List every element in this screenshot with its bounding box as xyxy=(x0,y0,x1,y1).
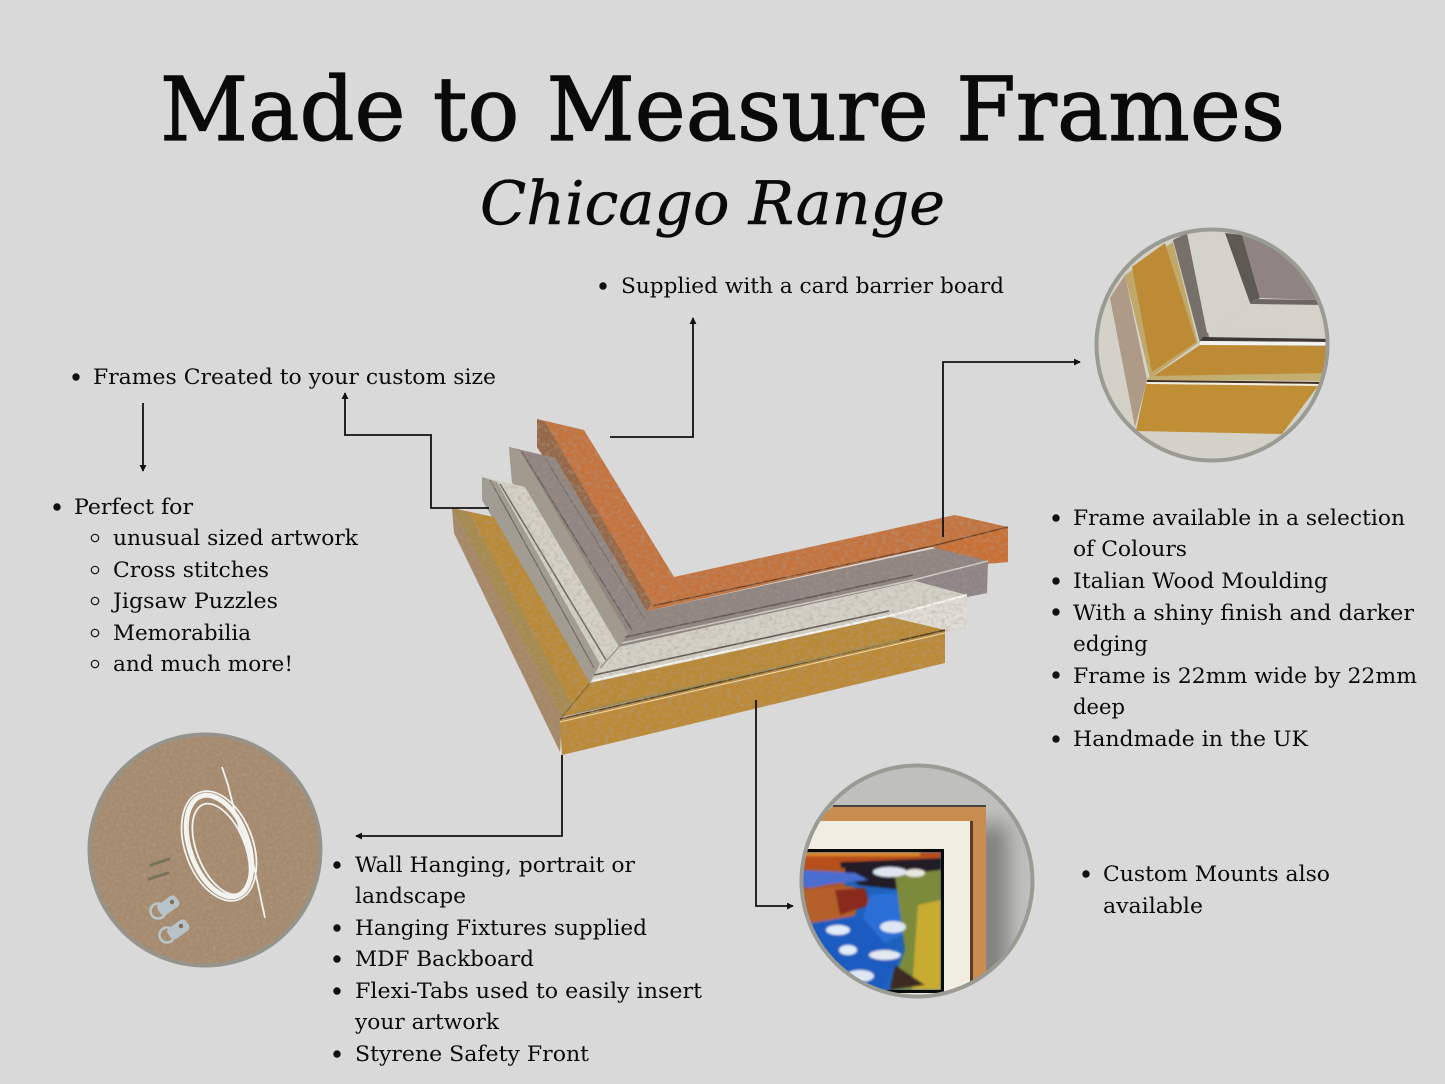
arrow: custom size down to perfect for xyxy=(142,403,144,471)
title: Made to Measure Frames xyxy=(160,58,1285,161)
text block: card barrier board: Supplied with a card barrier board xyxy=(621,274,1004,298)
text block: custom size: Frames Created to your custom size xyxy=(93,365,496,389)
text block: hanging and backing: Flexi-Tabs used to easily insert xyxy=(355,979,703,1003)
text block: hanging and backing: Styrene Safety Front xyxy=(355,1042,590,1066)
text block: hanging and backing: landscape xyxy=(355,884,466,908)
text block: perfect for list: Memorabilia xyxy=(113,621,251,645)
icon: D-ring hangers xyxy=(150,904,174,942)
text block: frame features: of Colours xyxy=(1073,537,1187,561)
icon: screws xyxy=(149,859,169,879)
frame corner samples xyxy=(452,419,1008,755)
arrow: frame to barrier board xyxy=(610,318,693,437)
text block: hanging and backing: Hanging Fixtures supplied xyxy=(355,916,647,940)
photo circle: frame corner close-up xyxy=(1090,225,1335,465)
text block: perfect for list xyxy=(53,495,358,676)
text block: hanging and backing: your artwork xyxy=(354,1010,499,1034)
painting xyxy=(800,852,941,990)
text block: frame features: Frame available in a selection xyxy=(1073,506,1405,530)
cream frame sample xyxy=(482,477,967,683)
text block: frame features: deep xyxy=(1073,695,1125,719)
text block: perfect for list: Perfect for xyxy=(74,495,194,519)
text block: hanging and backing: MDF Backboard xyxy=(355,947,534,971)
text block: custom mounts: available xyxy=(1103,894,1203,918)
photo circle: hanging fixtures xyxy=(85,730,325,970)
text block: perfect for list: Jigsaw Puzzles xyxy=(111,589,278,613)
icon: hanging cord xyxy=(180,766,266,918)
arrow: frame to corner photo xyxy=(943,362,1080,537)
arrow: frame to custom size xyxy=(345,393,489,508)
arrow: frame to hanging list xyxy=(356,755,562,836)
text block: perfect for list: Cross stitches xyxy=(113,558,269,582)
text block: hanging and backing: Wall Hanging, portrait or xyxy=(355,853,636,877)
text block: custom mounts xyxy=(1082,862,1330,918)
gray frame sample xyxy=(509,447,988,647)
gold frame sample xyxy=(452,508,945,755)
text block: perfect for list: and much more! xyxy=(113,652,293,676)
subtitle: Chicago Range xyxy=(480,169,945,239)
text block: hanging and backing xyxy=(333,853,703,1066)
text block: frame features: With a shiny finish and darker xyxy=(1073,601,1415,625)
text block: frame features: Italian Wood Moulding xyxy=(1073,569,1328,593)
text block: custom mounts: Custom Mounts also xyxy=(1103,862,1330,886)
text block: frame features: edging xyxy=(1073,632,1148,656)
text block: frame features xyxy=(1052,506,1417,751)
arrow: frame to mounted photo xyxy=(756,700,793,906)
orange frame sample xyxy=(537,419,1008,611)
text block: frame features: Handmade in the UK xyxy=(1073,727,1308,751)
text block: frame features: Frame is 22mm wide by 22mm xyxy=(1073,664,1417,688)
text block: perfect for list: unusual sized artwork xyxy=(113,526,358,550)
photo circle: framed painting with mount xyxy=(800,765,1035,1015)
